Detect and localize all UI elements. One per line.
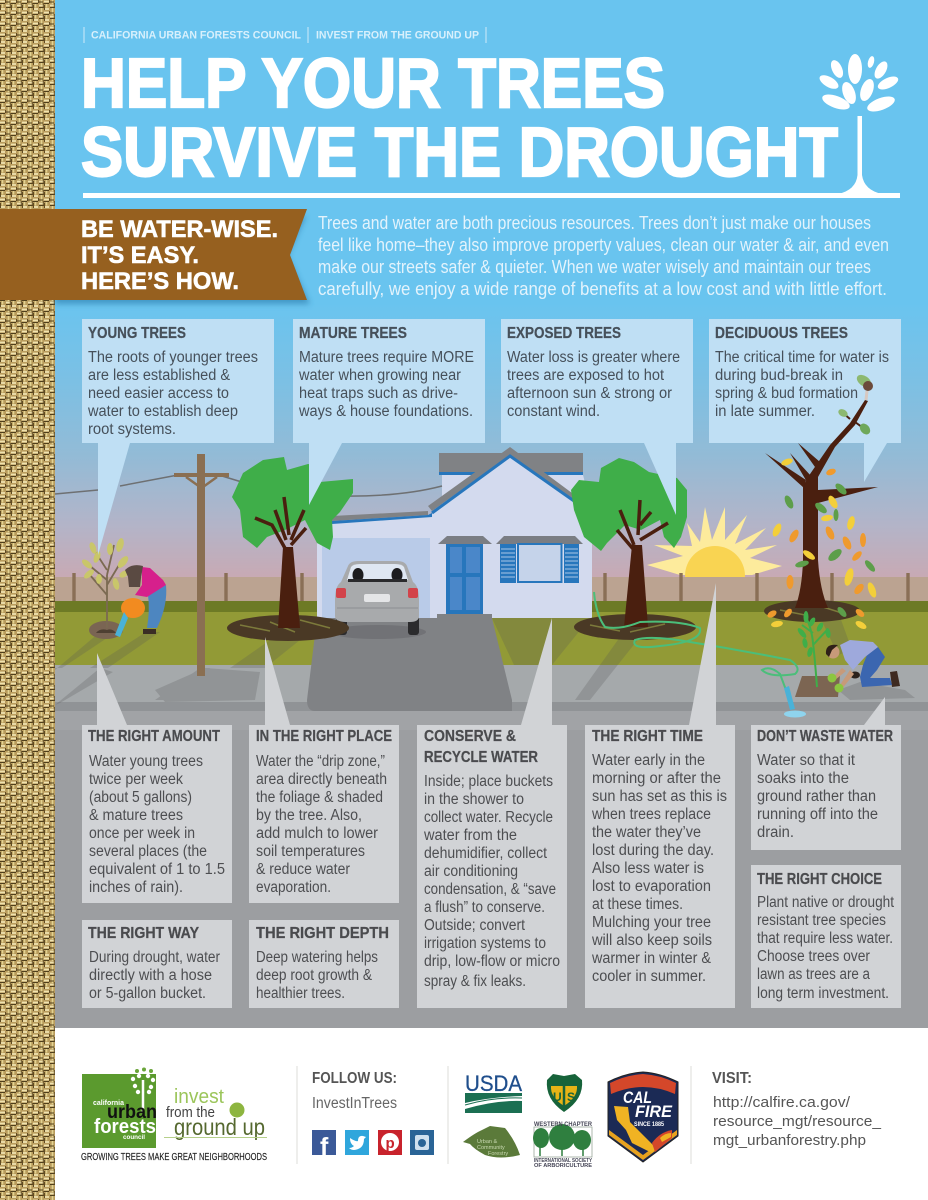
panel: the right choice: lawn as trees are a (757, 966, 870, 983)
intro paragraph: make our streets safer & quieter. When we water wisely and maintain our trees (318, 257, 871, 277)
panel: the right depth (249, 920, 399, 1008)
logo: California Urban Forests Council: california (93, 1100, 124, 1107)
young tree (80, 537, 130, 633)
panel: mature trees: ways & house foundations. (298, 403, 473, 420)
intro paragraph (318, 213, 889, 299)
panel: mature trees: heat traps such as drive- (299, 385, 458, 402)
title: SURVIVE THE DROUGHT (81, 113, 838, 191)
panel: the right way: During drought, water (89, 949, 220, 966)
panel: the right time: Also less water is (592, 860, 704, 877)
visit: VISIT: (712, 1070, 752, 1087)
panel: deciduous trees: during bud-break in (715, 367, 843, 384)
logo: invest from the ground up: from the (166, 1104, 215, 1121)
house (317, 447, 592, 639)
panel: conserve and recycle water: Outside; convert (424, 917, 526, 934)
panel: the right time: THE RIGHT TIME (592, 728, 703, 745)
door (437, 536, 492, 622)
top bar: organisations: CALIFORNIA URBAN FORESTS COUNCIL (91, 30, 301, 42)
panel: mature trees: Mature trees require MORE (299, 349, 474, 366)
panel: conserve and recycle water: water from the (423, 827, 517, 844)
logo: invest from the ground up (164, 1086, 267, 1140)
logo: California Urban Forests Council: forests (94, 1116, 156, 1138)
ribbon heading (0, 209, 310, 304)
panel: exposed trees: Water loss is greater where (507, 349, 680, 366)
panel: the right depth: THE RIGHT DEPTH (256, 925, 389, 942)
ribbon heading: HERE’S HOW. (81, 268, 239, 295)
logo: USDA (465, 1071, 522, 1113)
panel: mature trees: water when growing near (298, 367, 461, 384)
panel: in the right place: by the tree. Also, (256, 807, 362, 824)
visit: http://calfire.ca.gov/ (713, 1094, 851, 1111)
icon: white tree (817, 54, 900, 194)
hose nozzle and puddle (784, 686, 806, 718)
logo: western chapter ISA: OF ARBORICULTURE (534, 1163, 593, 1169)
panel: the right time: lost during the day. (592, 842, 714, 859)
panel: young trees: are less established & (88, 367, 231, 384)
logo: urban and community forestry leaf: Community (477, 1145, 505, 1151)
follow us (312, 1070, 434, 1161)
panel: exposed trees: EXPOSED TREES (507, 325, 621, 342)
logo: invest from the ground up: invest (174, 1086, 224, 1108)
deciduous tree (765, 372, 878, 631)
panel: the right time: warmer in winter & (591, 950, 712, 967)
logo: California Urban Forests Council: council (123, 1134, 145, 1141)
logo: invest from the ground up: ground up (174, 1114, 265, 1140)
logo: western chapter ISA (533, 1122, 593, 1169)
panel: in the right place: IN THE RIGHT PLACE (256, 728, 392, 745)
car (330, 561, 426, 639)
visit (712, 1070, 882, 1149)
panel: the right depth: deep root growth & (256, 967, 373, 984)
panel: don't waste water (751, 697, 901, 850)
logo: Cal Fire shield (608, 1072, 678, 1162)
panel: the right depth: Deep watering helps (256, 949, 378, 966)
logo: California Urban Forests Council: urban (107, 1102, 157, 1123)
panel: the right time: Water early in the (592, 752, 705, 769)
panel: in the right place: area directly beneath (256, 771, 387, 788)
sky background (55, 0, 928, 310)
logo: US Forest Service shield (547, 1074, 582, 1112)
panel: conserve and recycle water: Inside; place buckets (424, 773, 553, 790)
panel: don't waste water: running off into the (757, 806, 878, 823)
utility pole and wires (55, 454, 442, 676)
logo: Cal Fire shield: SINCE 1885 (634, 1121, 664, 1128)
top bar: organisations (84, 27, 486, 43)
panel: young trees: The roots of younger trees (88, 349, 258, 366)
panel: deciduous trees: in late summer. (715, 403, 815, 420)
intro paragraph: carefully, we enjoy a wide range of benefits at a low cost and with little effort. (318, 279, 887, 299)
sun (647, 507, 782, 606)
logo: US Forest Service shield: S (567, 1090, 575, 1104)
panel: conserve and recycle water: irrigation systems to (424, 935, 546, 952)
follow us: FOLLOW US: (312, 1070, 397, 1087)
title underline (83, 193, 900, 198)
panel: in the right place (249, 637, 399, 903)
panel: the right time: the water they’ve (592, 824, 701, 841)
panel: the right time: Mulching your tree (592, 914, 711, 931)
panel: the right amount: & mature trees (89, 807, 183, 824)
logo: USDA: USDA (465, 1071, 522, 1096)
panel: in the right place: & reduce water (256, 861, 350, 878)
panel: the right choice: Choose trees over (757, 948, 870, 965)
exposed tree right (571, 458, 687, 627)
logo: Cal Fire shield: CAL (623, 1088, 652, 1107)
panel: don't waste water: Water so that it (757, 752, 856, 769)
panel: the right time: sun has set as this is (592, 788, 727, 805)
panel: the right choice: THE RIGHT CHOICE (757, 871, 882, 888)
panel: the right time: will also keep soils (591, 932, 712, 949)
falling leaves (766, 457, 878, 631)
follow us: InvestInTrees (312, 1095, 397, 1112)
panel: exposed trees: trees are exposed to hot (507, 367, 665, 384)
panel: young trees: water to establish deep (87, 403, 238, 420)
panel: conserve and recycle water: CONSERVE & (424, 728, 516, 745)
panel: young trees: YOUNG TREES (88, 325, 186, 342)
tagline: GROWING TREES MAKE GREAT NEIGHBORHOODS (81, 1152, 267, 1163)
logo: US Forest Service shield: U (553, 1090, 562, 1104)
icon: pinterest: p (386, 1135, 395, 1152)
panel: conserve and recycle water: spray & fix leaks. (424, 973, 526, 990)
panel: the right choice (751, 865, 901, 1008)
fence (55, 573, 928, 602)
visit: mgt_urbanforestry.php (713, 1132, 866, 1149)
panel: the right amount: (about 5 gallons) (89, 789, 192, 806)
footer (55, 1028, 928, 1200)
woman watering tree (115, 565, 166, 637)
buds and new leaves (837, 372, 873, 436)
panel: deciduous trees: The critical time for water is (715, 349, 889, 366)
panel: conserve and recycle water: collect water. Recycle (424, 809, 553, 826)
panel: young trees (82, 319, 274, 555)
panel: conserve and recycle water (417, 618, 567, 1008)
panel: mature trees (293, 319, 485, 505)
ribbon heading: BE WATER-WISE. (81, 216, 278, 243)
panel: the right time (585, 583, 735, 1008)
panel: the right amount: once per week in (89, 825, 195, 842)
panel: deciduous trees (709, 319, 901, 482)
logo: western chapter ISA: INTERNATIONAL SOCIETY (534, 1158, 593, 1164)
panel: young trees: need easier access to (88, 385, 229, 402)
panel: the right amount: twice per week (89, 771, 183, 788)
panel: exposed trees: afternoon sun & strong or (507, 385, 672, 402)
panel: deciduous trees: DECIDUOUS TREES (715, 325, 848, 342)
panel: exposed trees: constant wind. (507, 403, 600, 420)
panel: in the right place: evaporation. (256, 879, 331, 896)
panel: conserve and recycle water: RECYCLE WATER (424, 749, 538, 766)
panel: the right choice: resistant tree species (757, 912, 886, 929)
panel: exposed trees (501, 319, 693, 515)
logo: Cal Fire shield: FIRE (635, 1102, 673, 1121)
sky gradient behind scene (55, 305, 928, 580)
top bar: organisations: INVEST FROM THE GROUND UP (316, 30, 479, 42)
panel: don't waste water: drain. (757, 824, 794, 841)
panel: in the right place: Water the “drip zone,” (256, 753, 385, 770)
panel: the right time: when trees replace (591, 806, 711, 823)
icon: facebook: f (320, 1133, 329, 1161)
mature tree left (232, 457, 353, 628)
panel: conserve and recycle water: in the shower to (424, 791, 524, 808)
panel: don't waste water: DON’T WASTE WATER (757, 728, 893, 745)
panel: the right choice: that require less water. (757, 930, 893, 947)
logo: western chapter ISA: WESTERN CHAPTER (534, 1122, 593, 1128)
logo: urban and community forestry leaf: Urban & (477, 1139, 498, 1145)
driveway (307, 618, 512, 711)
panel: the right time: cooler in summer. (592, 968, 706, 985)
panel: the right choice: Plant native or drought (757, 894, 895, 911)
panel: the right amount: equivalent of 1 to 1.5 (89, 861, 225, 878)
panel: conserve and recycle water: a flush” to conserve. (424, 899, 545, 916)
panel: the right amount: Water young trees (89, 753, 203, 770)
panel: the right time: at these times. (592, 896, 683, 913)
icon: instagram (410, 1130, 434, 1155)
logo: California Urban Forests Council (82, 1068, 157, 1148)
burlap side strip (0, 0, 55, 1200)
panel: the right amount: several places (the (89, 843, 207, 860)
panel: in the right place: add mulch to lower (256, 825, 378, 842)
logo: urban and community forestry leaf (463, 1126, 520, 1158)
panel: the right choice: long term investment. (757, 985, 889, 1002)
panel: in the right place: the foliage & shaded (256, 789, 383, 806)
panel: the right amount (82, 653, 232, 903)
title (81, 44, 838, 191)
window (496, 536, 583, 583)
sidewalk and road (55, 665, 928, 1028)
panel: the right depth: healthier trees. (256, 985, 345, 1002)
planting square and sapling (795, 611, 840, 697)
ground scene (55, 447, 928, 1028)
panel: the right way: or 5-gallon bucket. (89, 985, 206, 1002)
lawn (55, 601, 928, 666)
panel: conserve and recycle water: drip, low-flow or micro (424, 953, 560, 970)
panel: the right amount: THE RIGHT AMOUNT (88, 728, 220, 745)
title: HELP YOUR TREES (81, 44, 665, 122)
panel: the right way: THE RIGHT WAY (88, 925, 199, 942)
panel: young trees: root systems. (88, 421, 176, 438)
panel: the right amount: inches of rain). (89, 879, 183, 896)
ribbon heading: IT’S EASY. (81, 242, 199, 269)
panel: conserve and recycle water: dehumidifier, collect (424, 845, 548, 862)
visit: resource_mgt/resource_ (713, 1113, 882, 1130)
panel: deciduous trees: spring & bud formation (715, 385, 858, 402)
panel: the right way: directly with a hose (89, 967, 212, 984)
panel: in the right place: soil temperatures (256, 843, 365, 860)
shadows (55, 617, 915, 705)
panel: the right time: lost to evaporation (592, 878, 711, 895)
mulch rings (89, 600, 860, 641)
sprinkler hose (594, 592, 798, 690)
logo: urban and community forestry leaf: Forestry (488, 1151, 508, 1157)
panel: don't waste water: ground rather than (757, 788, 876, 805)
panel: the right time: morning or after the (592, 770, 721, 787)
panel: don't waste water: soaks into the (757, 770, 849, 787)
panel: the right way (82, 920, 232, 1008)
panel: conserve and recycle water: condensation, & “save (424, 881, 556, 898)
icon: twitter (345, 1130, 369, 1155)
man planting sapling (826, 640, 900, 692)
panel: conserve and recycle water: air conditioning (424, 863, 518, 880)
panel: mature trees: MATURE TREES (299, 325, 407, 342)
